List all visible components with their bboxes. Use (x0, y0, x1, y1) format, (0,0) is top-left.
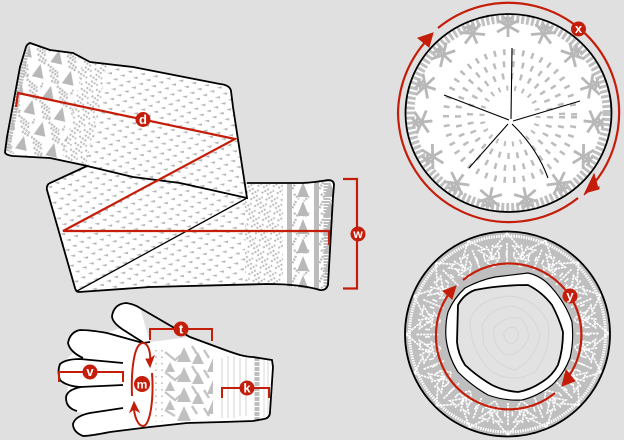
brim lace motifs (406, 232, 609, 436)
marker: y: y (566, 288, 574, 303)
marker: w: w (352, 227, 363, 241)
measurement line: scarf length d (16, 93, 329, 245)
marker: k: k (243, 380, 251, 396)
scarf upper panel (0, 40, 250, 200)
hat crown, top view (398, 3, 619, 222)
lace pattern on hand (156, 346, 268, 422)
marker: x: x (575, 21, 583, 36)
bracket: k (222, 380, 269, 398)
brim ring (405, 232, 610, 436)
crown disc (406, 14, 612, 212)
bracket: v (59, 364, 123, 382)
measurement arrows: x (398, 3, 619, 222)
edge motifs (411, 17, 605, 209)
inner band (446, 273, 573, 400)
measurement arrows: m (130, 343, 154, 426)
glove body (58, 303, 273, 436)
scarf illustration (0, 40, 366, 300)
radial stitches (446, 52, 574, 180)
bracket: t (150, 322, 212, 341)
marker: m: m (137, 378, 147, 392)
marker: x (571, 21, 586, 36)
marker: t: t (179, 322, 184, 336)
measurement bracket: scarf width w (343, 179, 366, 288)
hat brim, underside view (405, 232, 610, 436)
scarf lower panel (46, 166, 335, 293)
marker: d: d (139, 112, 147, 127)
marker: d (136, 112, 150, 127)
head opening (457, 285, 563, 392)
measurement arrows: y (436, 263, 581, 409)
glove illustration (58, 303, 273, 436)
marker: v: v (86, 364, 94, 379)
crown seams (444, 48, 580, 178)
marker: y (562, 288, 578, 304)
